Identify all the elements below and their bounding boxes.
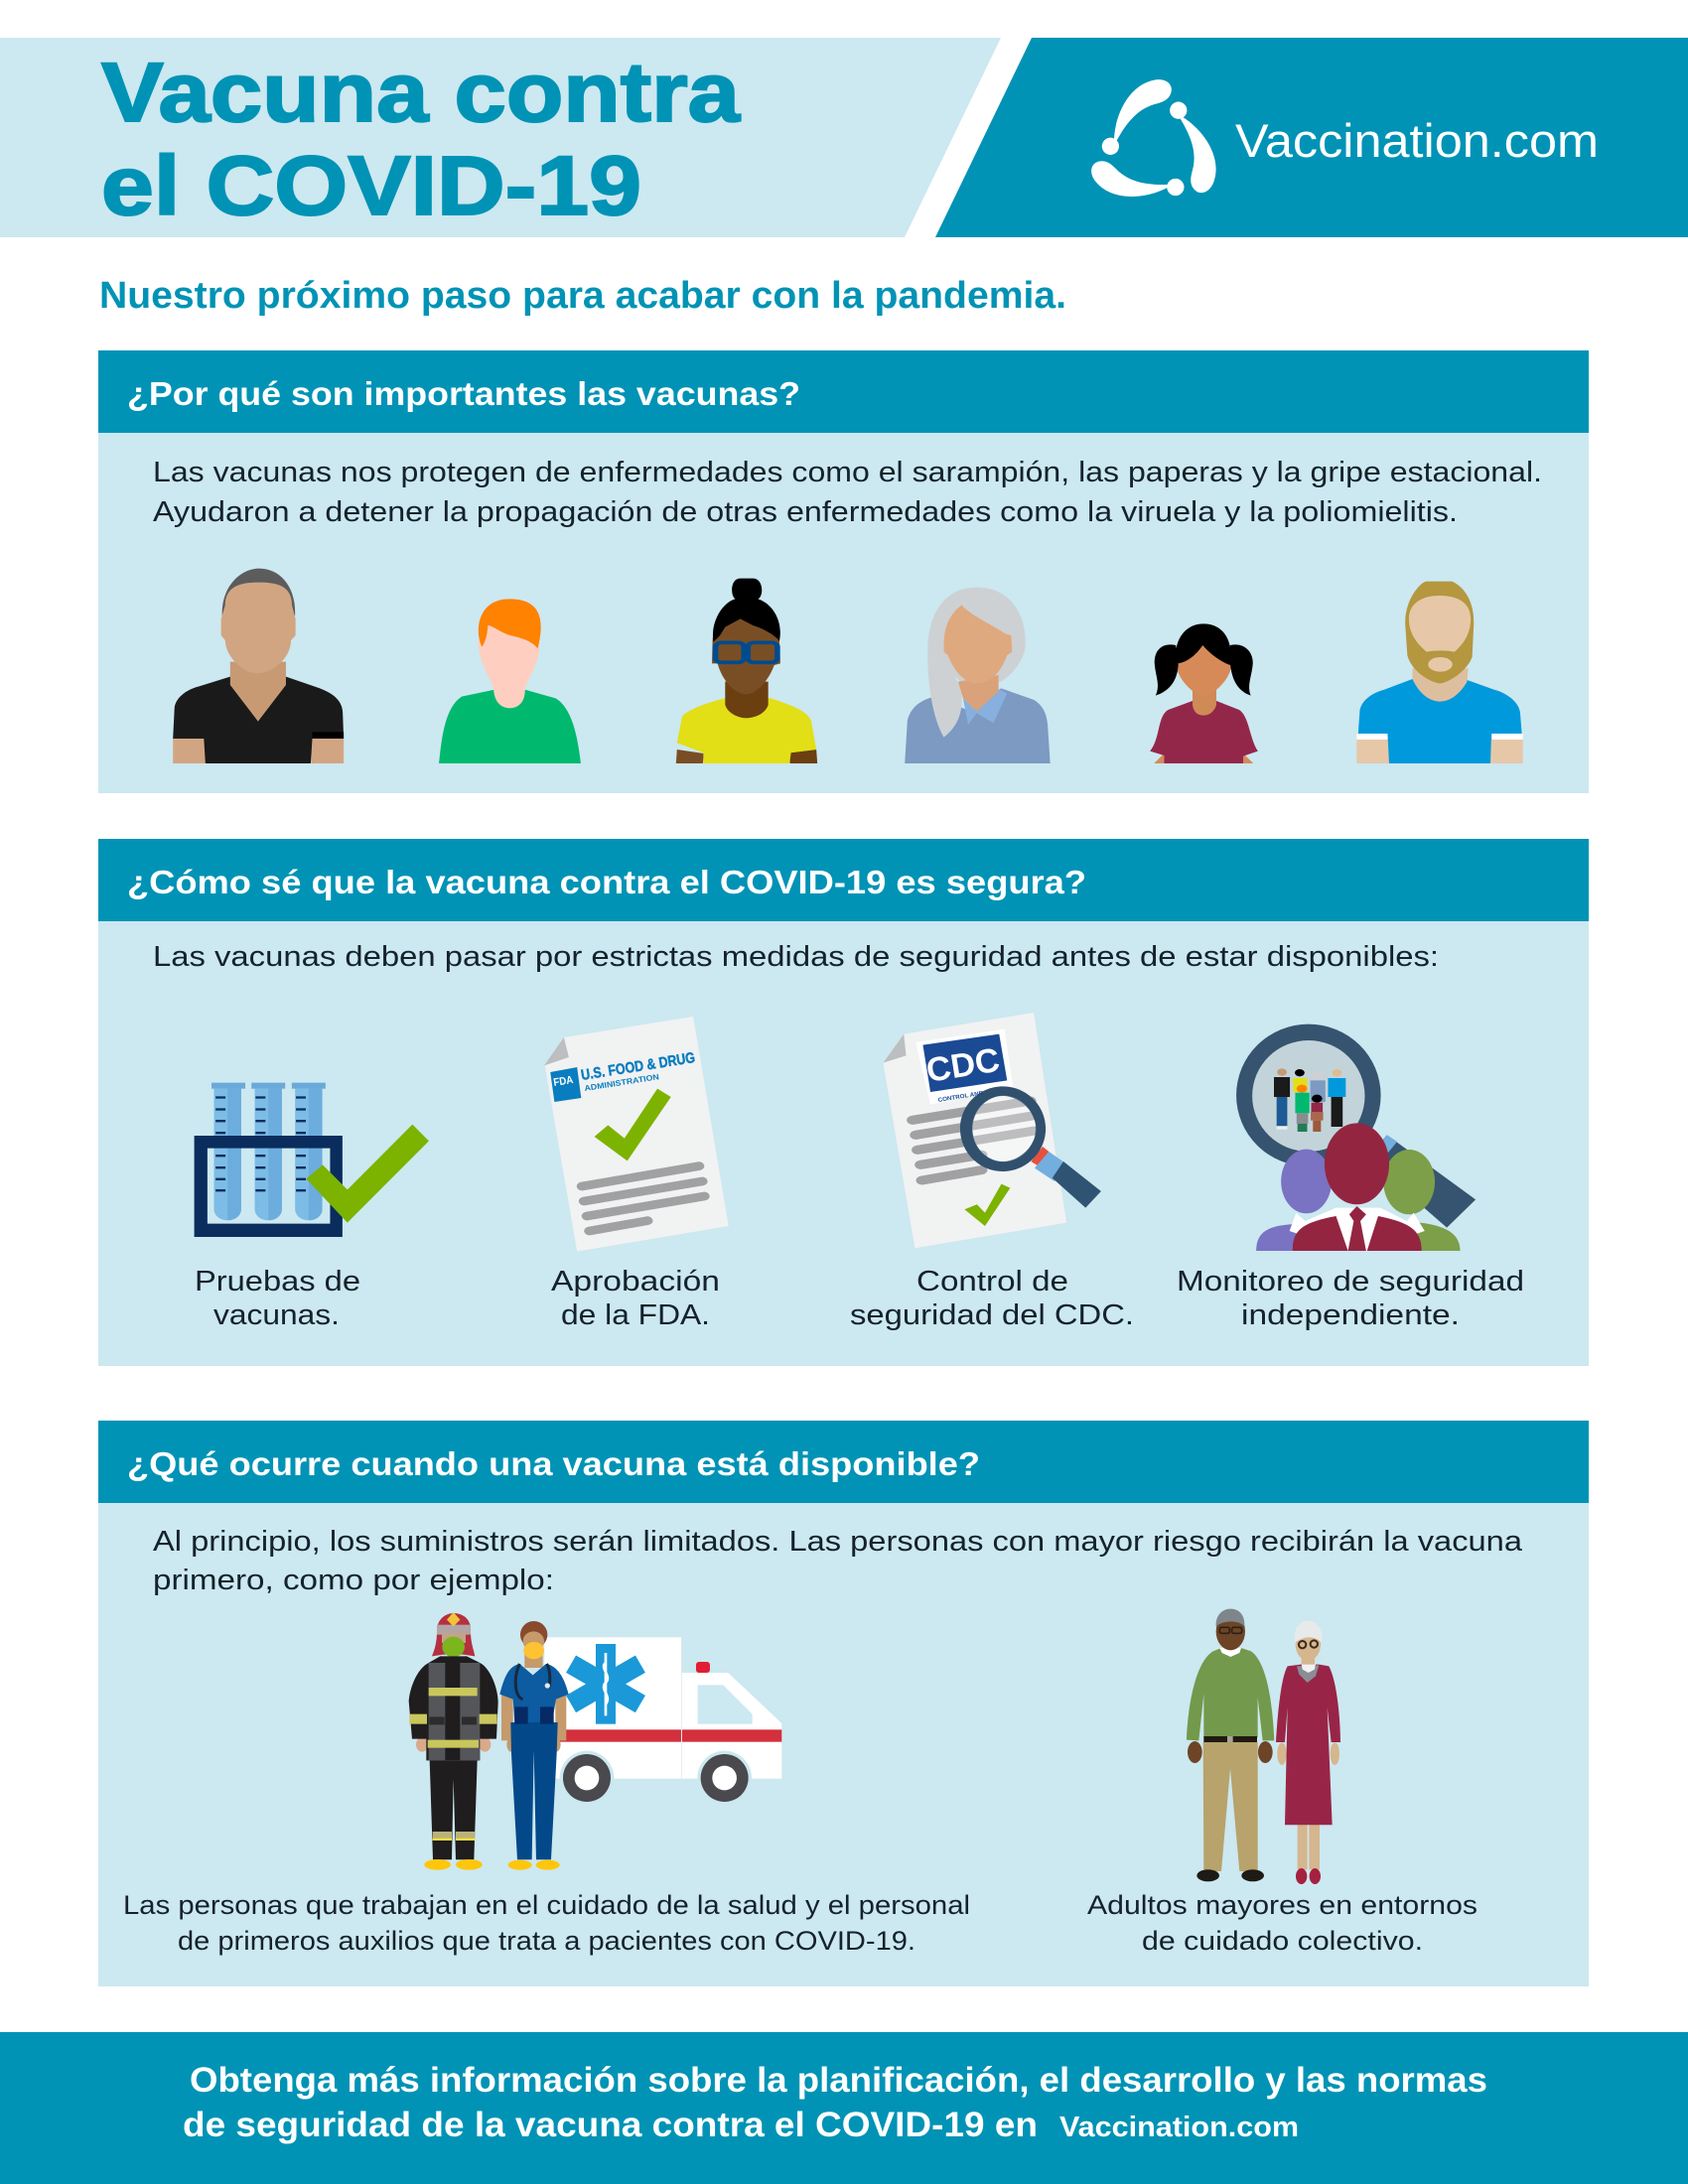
panel: why vaccines matter <box>98 350 1589 793</box>
icon: FDA approval document: ADMINISTRATION <box>584 1072 660 1093</box>
title panel: el COVID-19 <box>101 139 641 232</box>
icon: independent monitoring group <box>1236 1024 1476 1251</box>
icon: CDC document with magnifier: CONTROL AND <box>937 1091 984 1104</box>
footer: Vaccination.com <box>1059 2112 1299 2143</box>
icon: woman in yellow shirt with glasses <box>676 579 817 763</box>
caption: healthcare workers: de primeros auxilios que trata a pacientes con COVID-19. <box>178 1926 915 1956</box>
heading: ¿Cómo sé que la vacuna contra el COVID-19 es segura? <box>127 864 1086 900</box>
text block: Las vacunas nos protegen de enfermedades como el sarampión, las paperas y la gripe estacional. <box>153 457 1542 488</box>
text block <box>153 457 1542 528</box>
label: FDA approval: Aprobación <box>551 1266 720 1297</box>
panel: safety <box>98 839 1589 1366</box>
caption: older adults: de cuidado colectivo. <box>1142 1926 1423 1956</box>
icon: test tubes with check <box>195 1083 429 1237</box>
label: independent monitoring: independiente. <box>1241 1299 1460 1331</box>
footer: Obtenga más información sobre la planificación, el desarrollo y las normas <box>190 2061 1487 2100</box>
label: CDC safety control: Control de <box>916 1266 1068 1297</box>
text block <box>153 1526 1523 1596</box>
label: independent monitoring <box>1177 1266 1524 1331</box>
icon: CDC document with magnifier: CDC <box>923 1041 1002 1090</box>
icon: FDA approval document <box>544 1017 729 1252</box>
subtitle: Nuestro próximo paso para acabar con la pandemia. <box>99 275 1066 317</box>
caption: older adults <box>1087 1890 1477 1956</box>
text block: primero, como por ejemplo: <box>153 1565 554 1596</box>
icon: older man <box>1187 1609 1274 1881</box>
label: CDC safety control: seguridad del CDC. <box>850 1299 1134 1331</box>
title panel: Vacuna contra <box>101 46 741 139</box>
caption: older adults: Adultos mayores en entornos <box>1087 1890 1477 1920</box>
text block: Las vacunas deben pasar por estrictas medidas de seguridad antes de estar disponibles: <box>153 941 1439 973</box>
icon: older woman <box>1276 1621 1340 1884</box>
icon: FDA approval document: FDA <box>553 1074 574 1089</box>
footer <box>0 2032 1688 2184</box>
mini crowd <box>1274 1068 1345 1132</box>
icon: older woman with gray hair <box>905 588 1051 763</box>
label: CDC safety control <box>850 1266 1134 1331</box>
icon: CDC document with magnifier: CENTERS FOR DISEASE <box>935 1077 998 1093</box>
icon: Vaccination.com logo <box>1079 79 1234 217</box>
icon: nurse <box>499 1621 569 1870</box>
icon: FDA approval document: U.S. FOOD & DRUG <box>580 1049 696 1084</box>
logo panel: Vaccination.com <box>1235 114 1599 167</box>
caption: healthcare workers: Las personas que trabajan en el cuidado de la salud y el personal <box>123 1890 970 1920</box>
icon: girl with pigtails <box>1150 623 1258 763</box>
label: vaccine tests <box>195 1266 360 1331</box>
heading: ¿Qué ocurre cuando una vacuna está disponible? <box>127 1445 980 1482</box>
label: independent monitoring: Monitoreo de seguridad <box>1177 1266 1524 1297</box>
icon: boy in green shirt <box>439 599 581 763</box>
text block: Ayudaron a detener la propagación de otras enfermedades como la viruela y la poliomielitis. <box>153 496 1458 528</box>
panel: availability <box>98 1421 1589 1986</box>
heading: ¿Por qué son importantes las vacunas? <box>127 375 800 412</box>
logo panel <box>935 38 1688 237</box>
label: FDA approval: de la FDA. <box>561 1299 710 1331</box>
label: FDA approval <box>551 1266 720 1331</box>
icon: firefighter <box>409 1612 498 1870</box>
icon: bearded man in blue shirt <box>1356 582 1523 763</box>
icon: man in black shirt <box>173 569 344 763</box>
icon: ambulance <box>544 1637 781 1805</box>
icon: CDC document with magnifier <box>883 1013 1101 1248</box>
footer: de seguridad de la vacuna contra el COVID-19 en <box>183 2106 1038 2144</box>
header banner <box>0 38 1688 237</box>
title panel <box>0 38 1001 237</box>
text block: Al principio, los suministros serán limitados. Las personas con mayor riesgo recibirán la vacuna <box>153 1526 1523 1558</box>
caption: healthcare workers <box>123 1890 970 1956</box>
label: vaccine tests: vacunas. <box>213 1299 340 1331</box>
label: vaccine tests: Pruebas de <box>195 1266 360 1297</box>
